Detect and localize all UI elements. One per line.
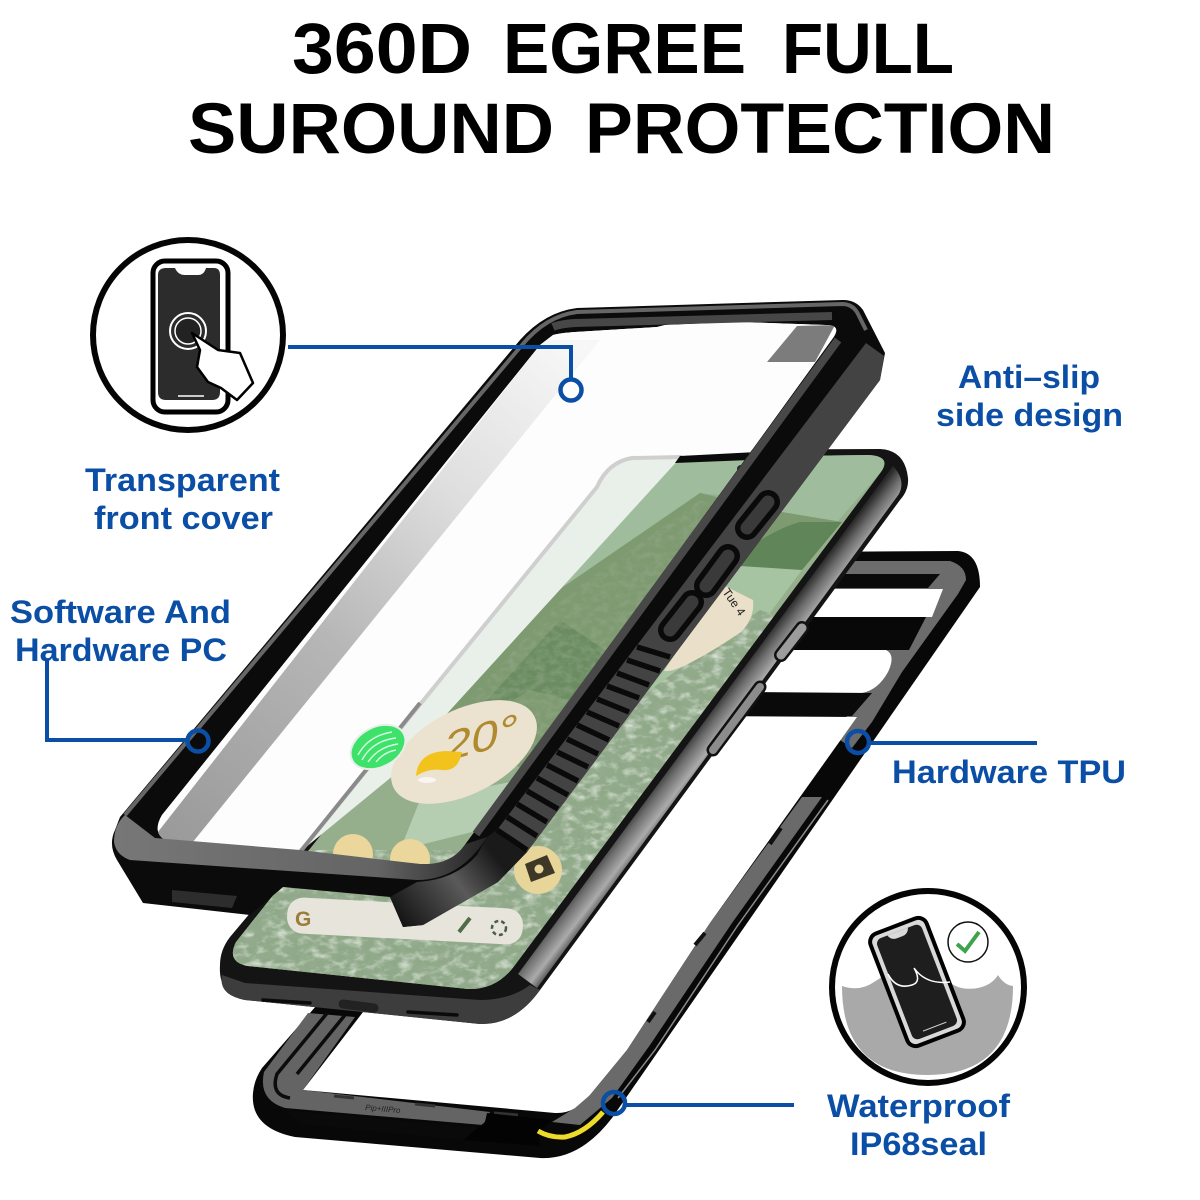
date blob xyxy=(664,586,753,671)
callout: hardware TPU xyxy=(847,731,1126,790)
icon: hand xyxy=(192,333,253,400)
screen wallpaper xyxy=(220,450,900,1000)
camera openings xyxy=(790,589,943,617)
icon: phone in water xyxy=(832,891,1024,1083)
icon: phone with touch xyxy=(93,240,283,430)
yellow waterproof seal xyxy=(538,1112,603,1137)
leader line xyxy=(625,1103,794,1107)
temperature: 20° xyxy=(442,703,521,771)
model marking: Pip+IIIPro xyxy=(365,1103,401,1115)
lower grey rim xyxy=(552,797,822,1125)
mountain xyxy=(443,493,842,780)
label: front cover xyxy=(94,500,273,536)
frame bevels xyxy=(125,304,866,815)
front cover xyxy=(112,300,885,927)
callout: software and hardware PC xyxy=(10,594,231,752)
charging port xyxy=(172,890,237,908)
date text: Tue 4 xyxy=(720,586,749,619)
label xyxy=(85,462,280,536)
upper grey rim xyxy=(800,561,966,748)
sky xyxy=(565,455,884,586)
back TPU frame xyxy=(253,551,980,1158)
camera app icon xyxy=(514,846,562,894)
glass white overlay xyxy=(158,322,836,850)
title: 360D xyxy=(292,10,472,89)
leader line xyxy=(47,660,187,740)
label: IP68seal xyxy=(850,1126,987,1162)
search bar xyxy=(286,897,524,945)
leader line xyxy=(869,741,1037,745)
widgets seen through glass xyxy=(333,700,537,864)
phone top edge xyxy=(675,452,757,463)
bump xyxy=(390,830,527,927)
middle phone body xyxy=(220,449,908,1024)
bottom face xyxy=(221,975,540,1024)
dock icons xyxy=(333,834,373,858)
title xyxy=(188,10,1055,169)
cover buttons and grip xyxy=(497,502,768,850)
callout: transparent front cover xyxy=(85,240,582,536)
callout: anti-slip side design: Anti–slip xyxy=(958,359,1100,395)
callout: anti-slip side design xyxy=(936,359,1123,433)
mottled foreground xyxy=(220,610,790,1000)
cover body with glass opening xyxy=(112,300,885,927)
label xyxy=(827,1088,1010,1162)
lower left rim with grooves xyxy=(263,1013,490,1125)
marker xyxy=(603,1092,625,1114)
side band with buttons xyxy=(518,466,901,988)
sun xyxy=(416,751,462,776)
fingerprint xyxy=(343,716,413,778)
corner shade xyxy=(767,325,835,362)
label: Hardware TPU xyxy=(892,754,1126,790)
reflection band xyxy=(150,340,600,848)
label: Hardware PC xyxy=(15,632,227,668)
power button xyxy=(747,502,768,528)
title: SUROUND xyxy=(188,90,554,169)
icon: check mark xyxy=(948,922,988,962)
black corner block xyxy=(463,1113,552,1146)
bottom rim xyxy=(114,815,487,880)
label: Transparent xyxy=(85,462,280,498)
label: Software And xyxy=(10,594,231,630)
grip ribs xyxy=(497,647,670,850)
label: Waterproof xyxy=(827,1088,1010,1124)
marker xyxy=(847,731,869,753)
side band xyxy=(497,343,884,852)
label xyxy=(10,594,231,668)
callout: anti-slip side design: side design xyxy=(936,397,1123,433)
black top bar xyxy=(800,574,940,588)
title: FULL xyxy=(782,10,954,89)
marker xyxy=(560,380,582,400)
main rear opening xyxy=(303,716,857,1113)
title: PROTECTION xyxy=(585,90,1055,169)
camera punch hole xyxy=(737,465,741,470)
title: EGREE xyxy=(503,10,746,89)
volume down xyxy=(670,602,692,630)
weather widget xyxy=(391,700,537,804)
callout: waterproof IP68 seal xyxy=(603,891,1024,1162)
volume up xyxy=(706,556,728,586)
screen wallpaper: G xyxy=(295,908,311,931)
marker xyxy=(188,730,208,752)
clips on rear rim xyxy=(334,1096,518,1115)
leader line xyxy=(288,347,571,379)
